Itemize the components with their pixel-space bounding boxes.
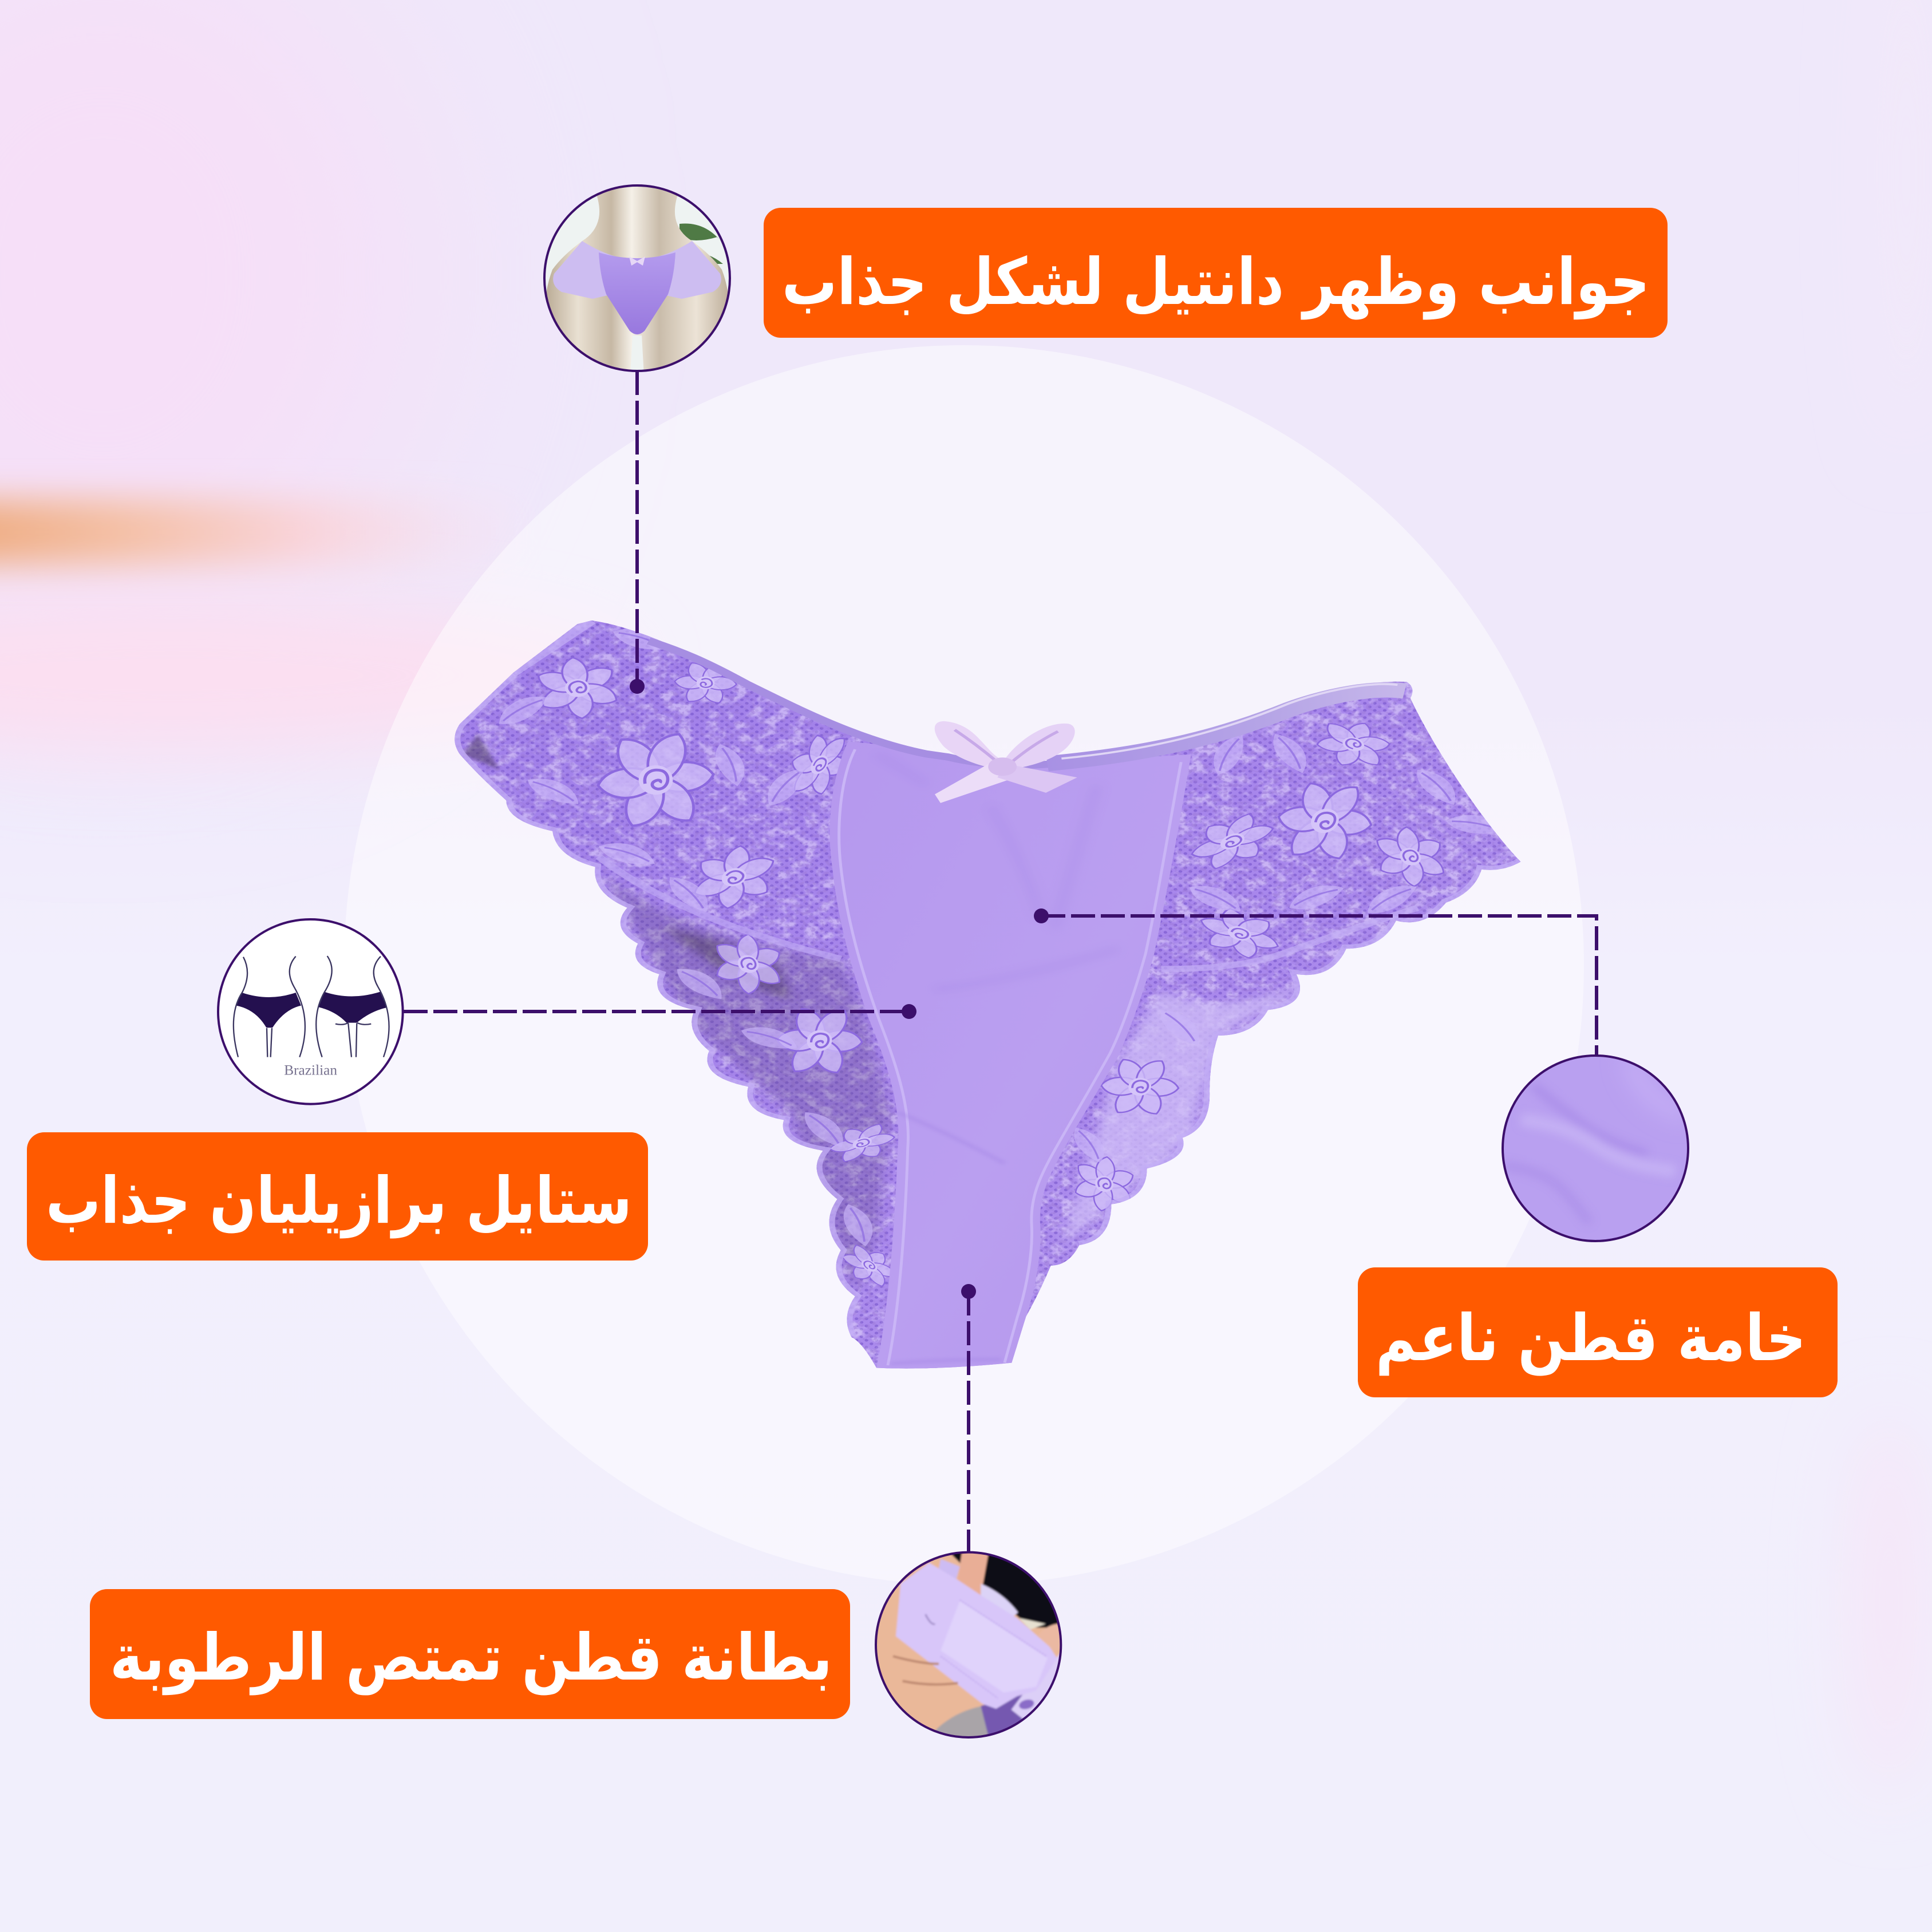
scalloped lace edge highlight xyxy=(455,621,1520,1337)
connector: brazilian cut to icon xyxy=(404,1004,916,1019)
product photo: lilac lace brazilian panty xyxy=(455,621,1520,1369)
heading label: lace sides and back: جوانب وظهر دانتيل لشكل جذاب xyxy=(782,245,1650,320)
label: moisture absorbing cotton lining xyxy=(90,1589,850,1719)
satin bow xyxy=(935,721,1077,803)
cotton panel seams and folds xyxy=(839,749,1181,1365)
thumbnail: soft cotton fabric swatch xyxy=(1498,1051,1693,1246)
heading label: lace sides and back xyxy=(764,208,1668,338)
thumbnail: cotton lining held in hand xyxy=(875,1551,1062,1739)
backdrop circle behind product xyxy=(344,345,1584,1585)
label: soft cotton material: خامة قطن ناعم xyxy=(1376,1301,1806,1376)
connector: soft cotton to fabric swatch xyxy=(1034,908,1597,1056)
connector: lace sides to thumbnail xyxy=(630,371,645,694)
label: brazilian style xyxy=(27,1132,648,1261)
thumbnail: mannequin wearing panty xyxy=(540,181,734,376)
lace sides and back xyxy=(455,621,1520,1369)
waistband xyxy=(649,641,1076,765)
cotton front panel xyxy=(830,742,1191,1369)
connector: cotton lining to photo xyxy=(961,1284,976,1551)
icon caption: Brazilian: Brazilian xyxy=(284,1062,337,1078)
label: soft cotton material xyxy=(1358,1267,1838,1397)
label: brazilian style: ستايل برازيليان جذاب xyxy=(46,1164,632,1238)
label: moisture absorbing cotton lining: بطانة قطن تمتص الرطوبة xyxy=(110,1621,832,1696)
icon: brazilian cut diagram xyxy=(218,919,403,1104)
